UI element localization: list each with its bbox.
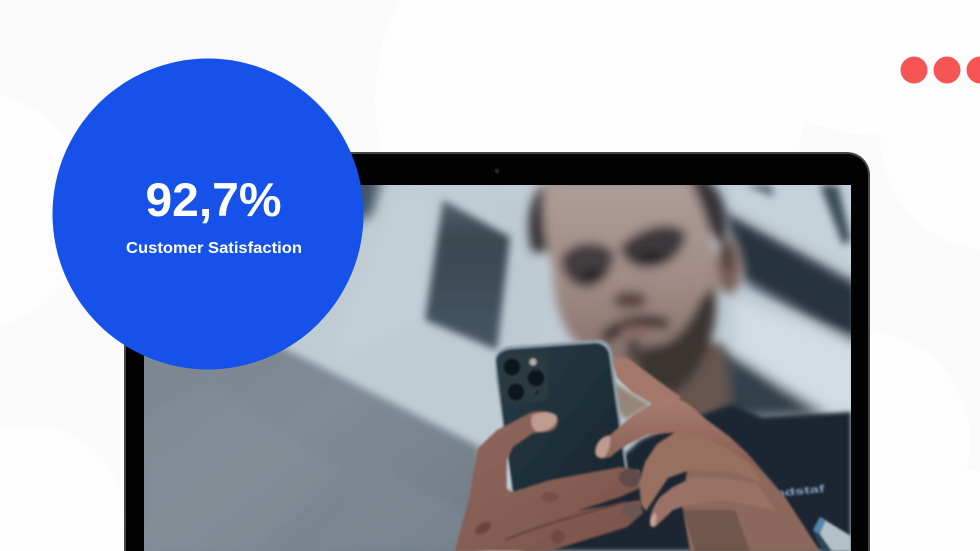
building background <box>278 185 851 551</box>
fingertips <box>619 469 641 487</box>
right thumbnail <box>596 436 610 458</box>
smartwatch <box>813 517 851 551</box>
window <box>425 200 510 350</box>
decorative red dots <box>900 56 980 84</box>
stat circle <box>52 58 364 370</box>
phone <box>495 340 628 500</box>
skin gap beside phone <box>615 382 650 421</box>
grey wall <box>144 346 482 551</box>
index finger <box>613 356 682 405</box>
stat value: 92,7% <box>146 174 282 227</box>
wrist <box>681 462 820 551</box>
skin <box>543 180 718 385</box>
pointing finger <box>594 398 754 464</box>
shirt logo text: ndstaf <box>774 484 826 500</box>
moustache <box>600 315 670 345</box>
ring finger <box>650 477 775 527</box>
neck <box>640 340 732 420</box>
left hand <box>455 411 643 551</box>
ear <box>716 238 742 294</box>
photo: man looking at phone <box>100 175 860 551</box>
mouth <box>619 326 655 332</box>
shirt <box>520 405 851 551</box>
finger shadow <box>505 502 625 540</box>
eye sockets <box>561 243 614 288</box>
face <box>529 175 742 393</box>
nose <box>613 291 647 309</box>
knuckle creases <box>474 522 492 534</box>
left thumbnail <box>531 412 557 432</box>
middle finger <box>639 431 762 511</box>
laptop frame <box>124 152 870 551</box>
right hand <box>595 356 820 551</box>
building details <box>360 185 851 419</box>
eyes <box>579 270 605 280</box>
webcam <box>494 168 500 174</box>
stat label: Customer Satisfaction <box>126 240 302 257</box>
wall reflections <box>144 385 480 551</box>
hair <box>529 175 727 252</box>
beard <box>632 285 716 393</box>
top right stripes <box>745 185 851 245</box>
sliver behind thumb <box>507 462 511 492</box>
camera module <box>504 360 547 402</box>
